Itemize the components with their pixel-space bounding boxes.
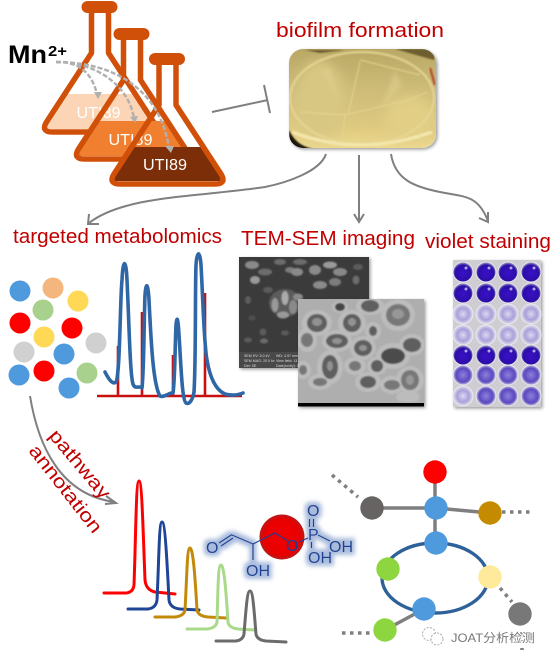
metabolite dots: [8, 278, 106, 398]
flask 2: [76, 28, 188, 159]
biofilm photo: [289, 49, 436, 150]
chromatogram with red bars: [97, 254, 243, 403]
watermark: [422, 628, 535, 645]
molecule bonds over circle: O: [286, 538, 298, 555]
SEM image: [239, 257, 369, 368]
flask 1: [44, 1, 156, 132]
SEM image: Date(m/d/y): 11/: [276, 364, 302, 368]
arrow to imaging: [354, 155, 364, 222]
pathway arrow: [30, 396, 116, 504]
SEM image: SEM MAG: 20.0 kx: [244, 359, 275, 363]
Mn2+ label: Mn: [8, 41, 47, 69]
flask 3: [112, 53, 224, 184]
molecule bonds over circle: [253, 533, 308, 555]
flask 1: UTI89: [76, 105, 121, 122]
SEM image: Det: SE: [244, 364, 257, 368]
Mn2+ label: [8, 41, 67, 69]
watermark: JOAT分析检测: [451, 630, 535, 645]
TEM image: [295, 297, 425, 406]
SEM image: WD: 4.97 mm: [276, 354, 298, 358]
flask 2: UTI89: [108, 132, 153, 149]
dashed arrows: Mn into flasks: [56, 62, 174, 153]
rotated label: pathway: pathway: [44, 426, 115, 504]
molecule structure: OH: [308, 550, 332, 567]
arrow to staining: [391, 154, 488, 222]
red highlight circle: [260, 514, 304, 560]
molecule structure: O: [206, 540, 218, 557]
molecule structure: O: [307, 503, 319, 520]
Mn2+ label: 2+: [48, 43, 67, 60]
molecule structure: [206, 503, 353, 580]
rotated label: annotation: annotation: [24, 441, 106, 538]
heading: TEM-SEM imaging: TEM-SEM imaging: [241, 228, 415, 250]
flask 3: UTI89: [143, 157, 187, 174]
molecule structure: OH: [246, 563, 270, 580]
violet stained well plate: [453, 260, 541, 407]
heading: targeted metabolomics: targeted metabolomics: [13, 226, 222, 248]
inhibition bar: [212, 85, 270, 113]
arrow to metabolomics: [88, 154, 326, 224]
molecule structure: P: [308, 527, 319, 544]
stacked peaks: [104, 481, 286, 642]
heading: violet staining: violet staining: [425, 231, 551, 253]
SEM image: View field: 13.8 µm: [276, 359, 306, 363]
molecule structure: OH: [329, 539, 353, 556]
heading: biofilm formation: biofilm formation: [276, 20, 444, 42]
metabolic network: [332, 460, 532, 650]
SEM image: SEM HV: 5.0 kV: [244, 354, 270, 358]
